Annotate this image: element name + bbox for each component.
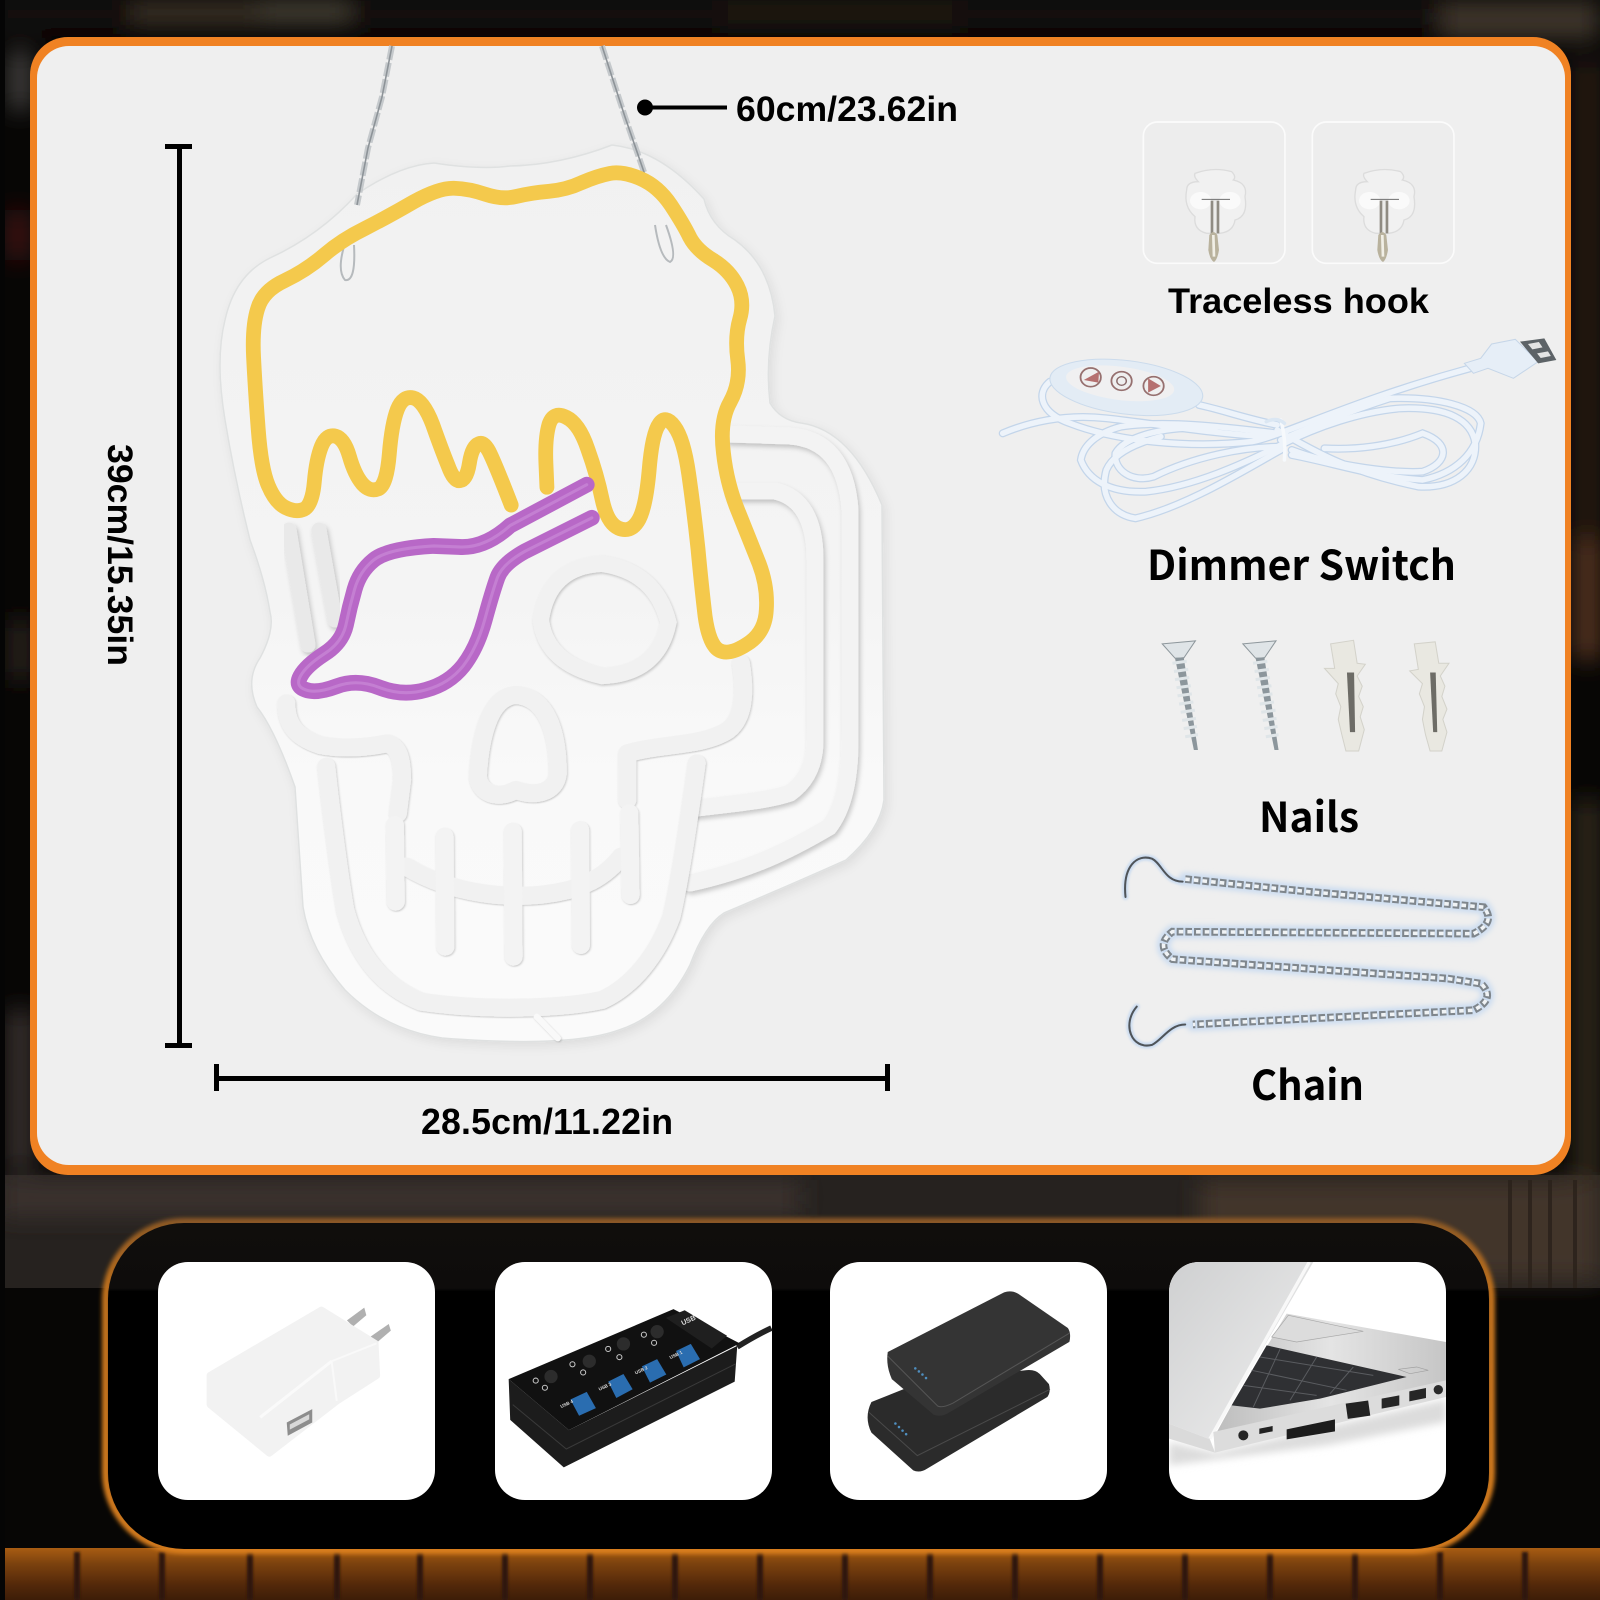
- dimension: chain length: 60cm/23.62in: [736, 89, 958, 129]
- chin wire: [537, 1017, 558, 1038]
- neon sign: [220, 46, 884, 1042]
- icon: chain with S hooks: [1125, 858, 1488, 1046]
- accessory: traceless hooks: Traceless hook: [1168, 281, 1429, 321]
- yellow neon tube: [253, 173, 767, 652]
- icon: black USB hub: USB 1: [669, 1350, 683, 1360]
- dimension: height: 39cm/15.35in: [100, 444, 140, 666]
- hanging chains: [341, 46, 673, 280]
- dimension: chain length: [637, 89, 958, 129]
- wooden floor: [5, 1548, 1600, 1600]
- icon: screws and anchors: [1162, 640, 1449, 751]
- accessory: nails: [1162, 640, 1449, 844]
- main panel: [30, 37, 1571, 1175]
- dimension: width: 28.5cm/11.22in: [421, 1102, 673, 1142]
- dimension: width: [214, 1064, 890, 1142]
- icon: white USB wall plug: [210, 1308, 391, 1453]
- icon: hook pads: [1143, 122, 1454, 263]
- icon: black USB hub: USB 3: [598, 1381, 613, 1392]
- card: USB hub: [495, 1262, 772, 1500]
- accessory: chain: [1125, 858, 1488, 1112]
- accessory: chain: Chain: [1251, 1052, 1364, 1112]
- accessory: dimmer switch: Dimmer Switch: [1147, 532, 1456, 592]
- icon: black USB hub: USB: [680, 1314, 697, 1327]
- mug handle tubes: [690, 434, 850, 883]
- right cheek: [627, 663, 743, 800]
- icon: black USB hub: USB 2: [634, 1365, 649, 1375]
- icon: black USB hub: USB 4: [560, 1399, 574, 1409]
- dimension: height: [100, 144, 192, 1048]
- acrylic backing: [220, 145, 884, 1042]
- card: power bank: [830, 1262, 1107, 1500]
- accessory: nails: Nails: [1259, 784, 1359, 844]
- icon: USB cable with dimmer: [1003, 338, 1556, 518]
- teeth: [395, 813, 631, 957]
- purple neon eye patch: [299, 485, 592, 693]
- icon: black USB hub: [509, 1309, 771, 1467]
- accessory: dimmer switch: [1003, 338, 1556, 592]
- accessory: traceless hooks: [1143, 122, 1454, 321]
- icon: two stacked power banks: [868, 1291, 1070, 1472]
- card: wall adapter: [158, 1262, 435, 1500]
- icon: silver laptop: [1169, 1262, 1446, 1465]
- left cheek: [286, 703, 402, 813]
- smile: [406, 857, 621, 896]
- nose: [478, 695, 558, 795]
- power options bar: [106, 1222, 1491, 1550]
- skull left tubes: [289, 530, 335, 645]
- white unlit tubes: lower skull: [286, 663, 743, 1038]
- jaw: [326, 763, 697, 1008]
- right eye tube: [541, 564, 668, 676]
- card: laptop: [1169, 1262, 1446, 1500]
